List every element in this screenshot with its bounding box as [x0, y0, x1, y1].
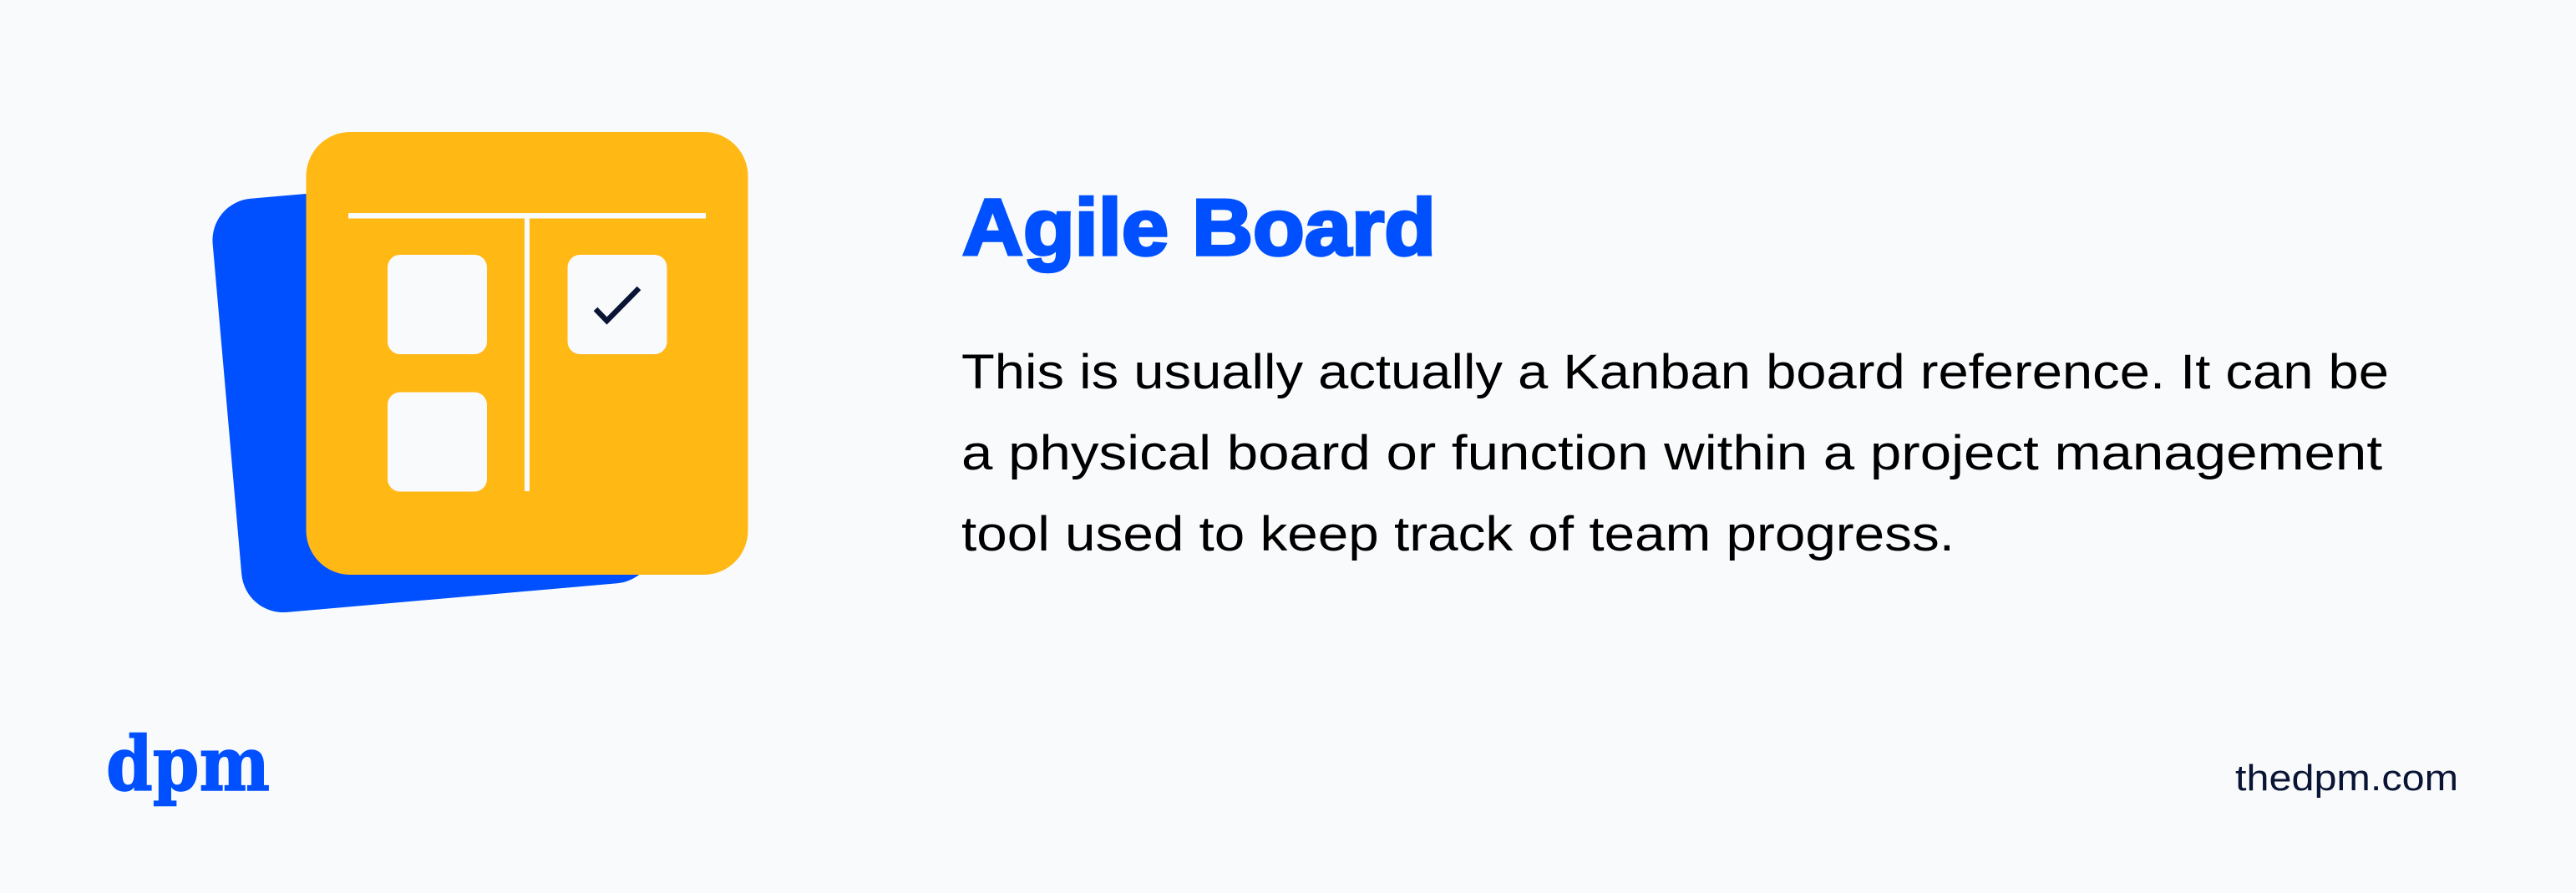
description line 3: tool used to keep track of team progress.: [961, 507, 1955, 561]
logo: dpm: dpm: [106, 720, 270, 809]
icon: task card bottom left: [388, 393, 487, 491]
description line 1: This is usually actually a Kanban board reference. It can be: [961, 345, 2389, 399]
website url: thedpm.com: [2235, 758, 2458, 799]
icon: yellow board: [306, 132, 748, 575]
icon: board header line: [348, 213, 706, 219]
icon: board column divider: [525, 216, 530, 491]
description text: [961, 345, 2389, 561]
icon: check mark: [596, 288, 639, 321]
icon: completed task card: [568, 255, 667, 354]
heading: Agile Board: [962, 183, 1436, 272]
icon: task card top left: [388, 255, 487, 354]
icon: tilted blue back card: [209, 166, 659, 616]
description line 2: a physical board or function within a project management: [961, 426, 2382, 480]
icon: agile board illustration: [209, 132, 748, 616]
